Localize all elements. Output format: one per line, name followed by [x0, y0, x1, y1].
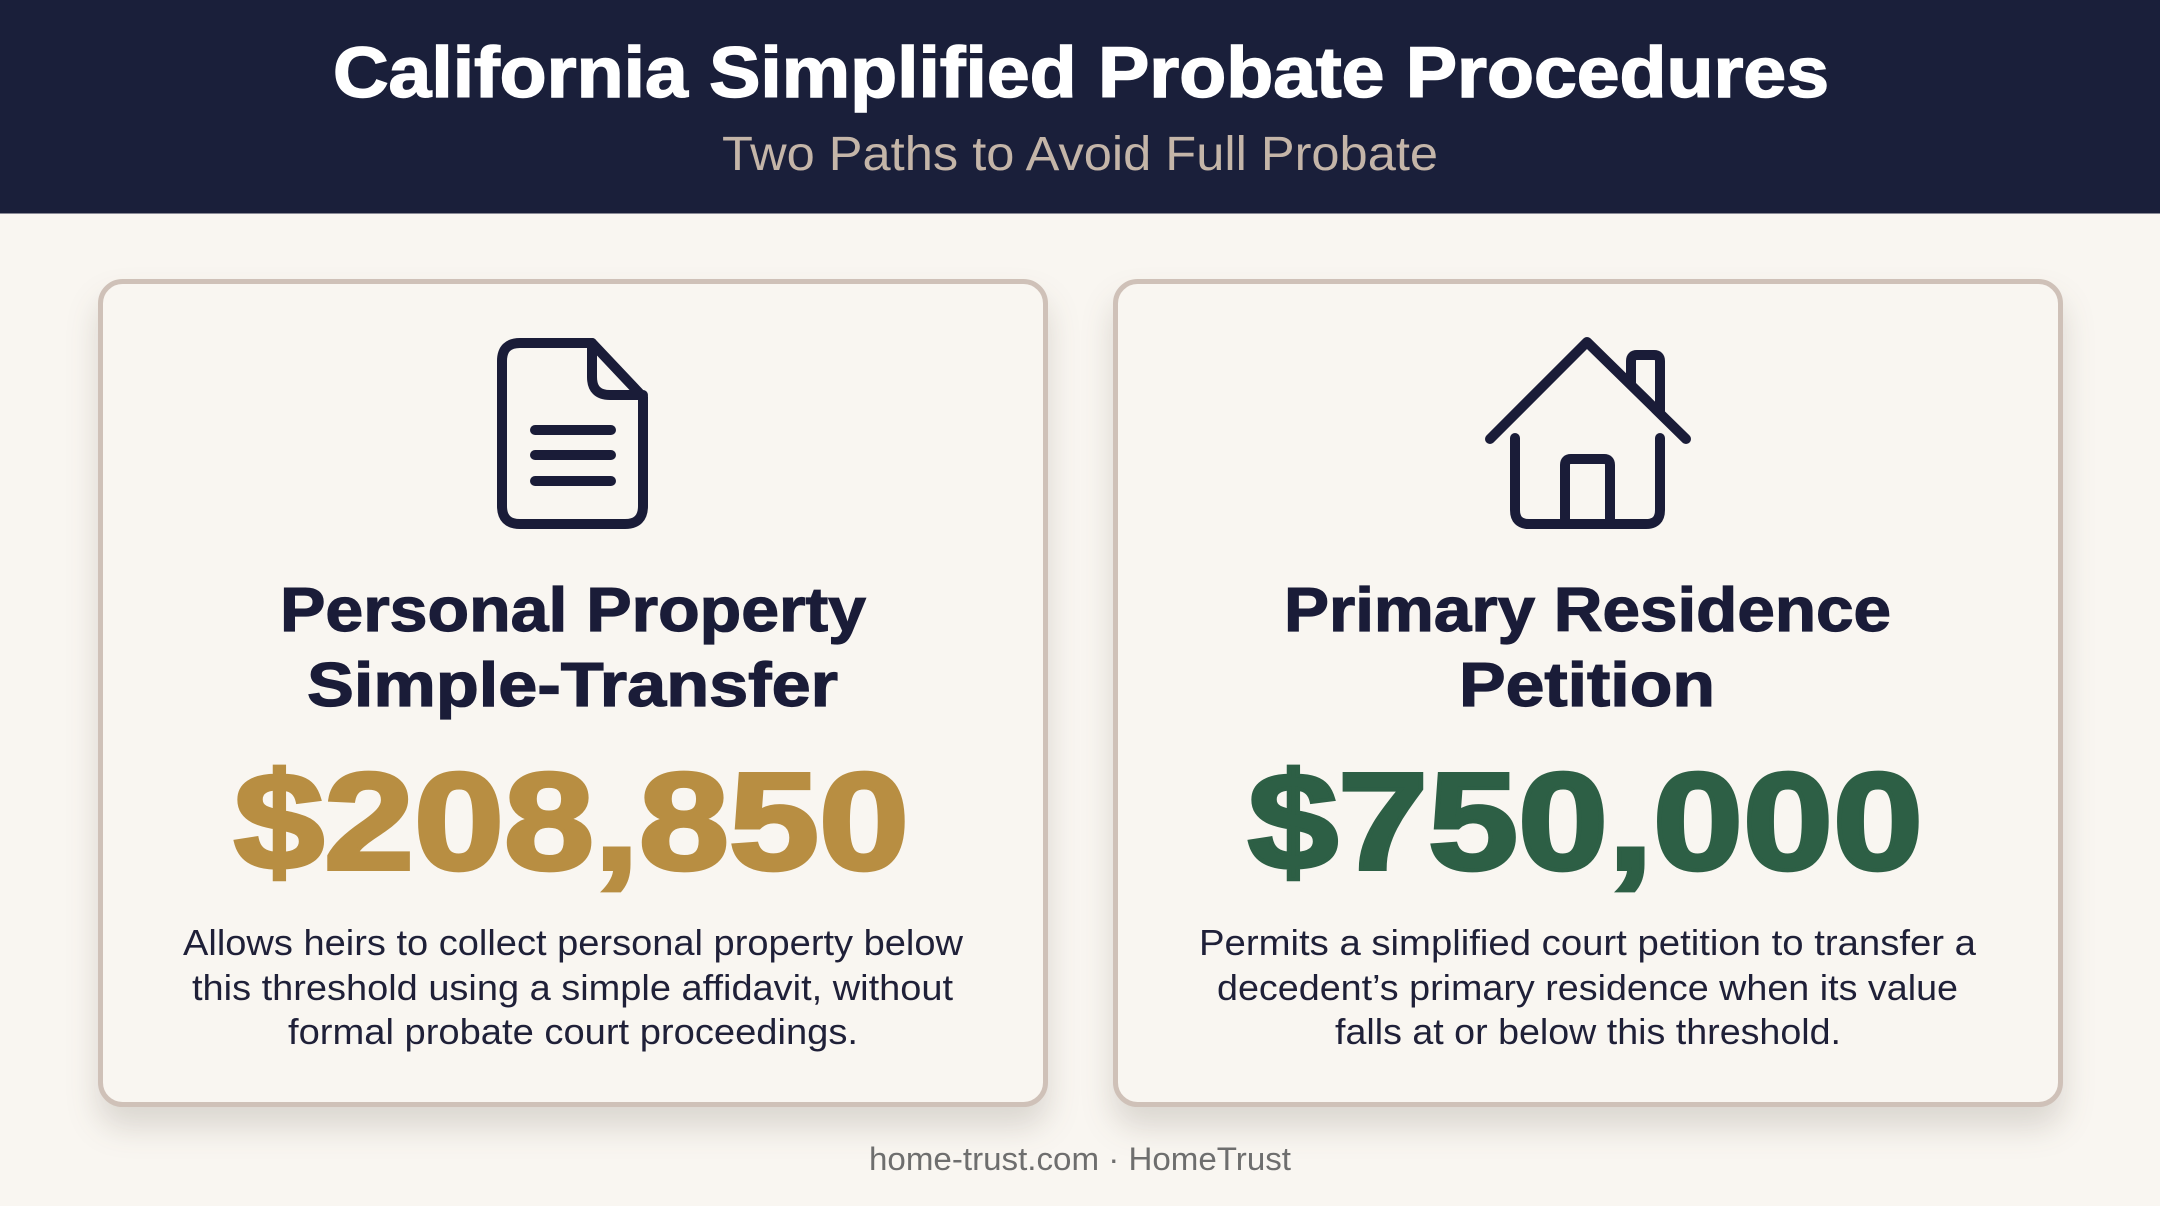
heading: personal property simple-transfer — [280, 576, 867, 720]
panel: primary residence petition — [1116, 282, 2060, 1104]
amount: $208,850: $208,850 — [234, 745, 909, 899]
header band — [0, 0, 2160, 214]
heading: primary residence petition — [1284, 576, 1891, 720]
description: Permits a simplified court petition to transfer a — [1199, 922, 1977, 963]
icon: document — [502, 343, 643, 524]
panel: personal property simple-transfer — [100, 282, 1046, 1104]
footer source line: home-trust.com · HomeTrust — [869, 1141, 1291, 1177]
card background — [100, 282, 1046, 1104]
description — [1199, 922, 1977, 1052]
card background — [1116, 282, 2060, 1104]
subtitle: Two Paths to Avoid Full Probate — [722, 128, 1438, 181]
description: Allows heirs to collect personal property below — [183, 922, 964, 963]
heading: personal property simple-transfer: Personal Property — [280, 576, 867, 645]
heading: primary residence petition: Primary Residence — [1284, 576, 1891, 645]
description: decedent’s primary residence when its value — [1217, 967, 1958, 1008]
description: this threshold using a simple affidavit, without — [192, 967, 953, 1008]
amount: $750,000: $750,000 — [1248, 745, 1923, 899]
title: California Simplified Probate Procedures — [333, 34, 1829, 113]
icon: house — [1490, 342, 1686, 524]
heading: personal property simple-transfer: Simple-Transfer — [307, 651, 838, 720]
description: falls at or below this threshold. — [1335, 1011, 1841, 1052]
heading: primary residence petition: Petition — [1459, 651, 1715, 720]
description — [183, 922, 964, 1052]
description: formal probate court proceedings. — [288, 1011, 858, 1052]
